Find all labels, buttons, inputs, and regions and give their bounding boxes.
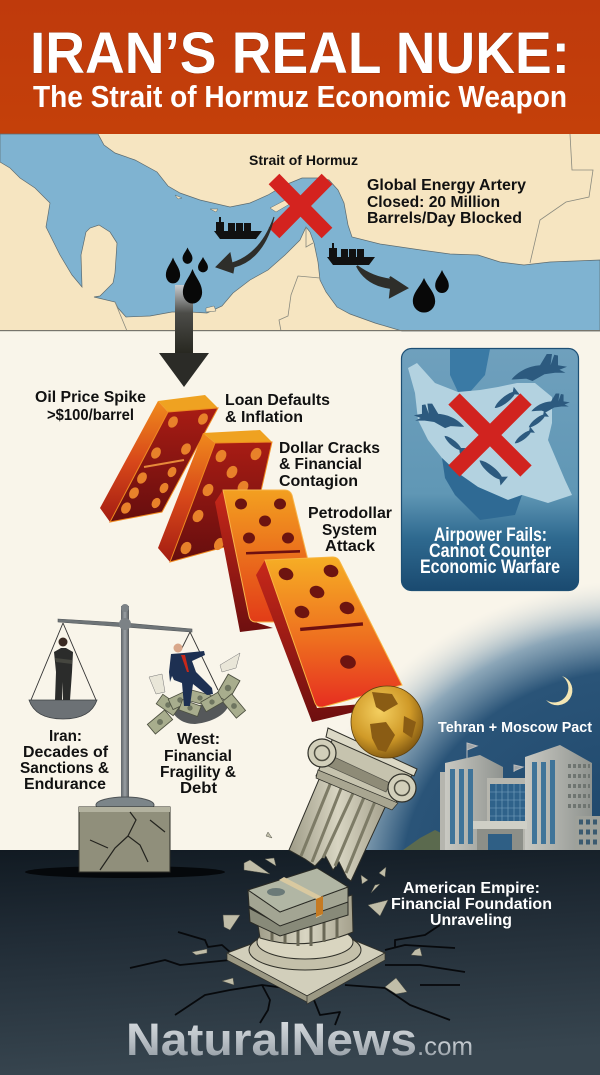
- loan defaults label: [225, 392, 330, 426]
- money stack: [248, 868, 348, 936]
- column capital: [308, 728, 417, 810]
- flying papers: [149, 653, 240, 694]
- jets and bombs: [414, 354, 570, 485]
- panel: Strait of Hormuz map: [0, 134, 600, 331]
- American Empire label: [391, 880, 552, 929]
- energy artery label: [367, 177, 526, 227]
- column shaft: [289, 777, 387, 881]
- arrow: tanker right: [357, 266, 407, 297]
- block shadow: [25, 866, 225, 878]
- Iran label: Endurance: [24, 776, 106, 793]
- American Empire label: Financial Foundation: [391, 896, 552, 913]
- persian gulf: [442, 458, 522, 520]
- ground: [0, 850, 600, 1075]
- domino 4: [256, 557, 405, 722]
- domino 3: [215, 490, 308, 632]
- Tehran Moscow label: Tehran + Moscow Pact: [438, 719, 592, 736]
- portico: [473, 821, 527, 850]
- money pile: [147, 674, 246, 734]
- night sky: [300, 560, 600, 855]
- loan defaults label: & Inflation: [225, 409, 303, 426]
- energy artery label: Closed: 20 Million: [367, 194, 500, 211]
- Iran label: [20, 728, 109, 793]
- energy artery label: Global Energy Artery: [367, 177, 526, 194]
- caspian sea: [450, 349, 490, 392]
- dollar cracks label: Contagion: [279, 473, 358, 490]
- icon: red X over strait: [274, 179, 327, 233]
- globe: [351, 686, 423, 758]
- panel: airpower fails: [402, 348, 578, 590]
- islands: [175, 195, 300, 312]
- strait label: Strait of Hormuz: [249, 153, 358, 168]
- arrow: down from oil to dominoes: [159, 269, 209, 387]
- icon: red X: [454, 399, 526, 471]
- rubble: [192, 832, 422, 994]
- heading: IRAN’S REAL NUKE:: [30, 21, 570, 86]
- low annex: [575, 816, 600, 850]
- arrow: tanker left: [216, 217, 274, 273]
- American Empire label: American Empire:: [403, 880, 540, 897]
- Iran scale pan: [29, 623, 97, 719]
- beam: [58, 619, 192, 632]
- right tower: [514, 745, 592, 850]
- caption: Airpower Fails:: [434, 525, 547, 546]
- petrodollar label: [308, 505, 392, 555]
- dollar cracks label: [279, 440, 380, 490]
- water: [0, 134, 600, 331]
- left tower: [440, 743, 503, 850]
- petrodollar label: Attack: [325, 538, 375, 555]
- hill: [403, 830, 445, 850]
- West label: West:: [177, 731, 220, 748]
- domino labels: [35, 389, 392, 555]
- caption: Cannot Counter: [429, 541, 552, 562]
- column base torus: [249, 930, 361, 970]
- map of Iran: [408, 363, 572, 503]
- dollar cracks label: & Financial: [279, 456, 362, 473]
- base dome: [96, 797, 154, 813]
- domino 2: [158, 430, 272, 562]
- title banner: [0, 0, 600, 134]
- icon: oil drops: [166, 248, 449, 313]
- oil price label: >$100/barrel: [47, 407, 134, 424]
- loan defaults label: Loan Defaults: [225, 392, 330, 409]
- broken column with globe: [227, 686, 423, 1004]
- American Empire label: Unraveling: [430, 912, 512, 929]
- caption: Economic Warfare: [420, 557, 560, 578]
- balance scale: [20, 604, 246, 878]
- West label: Fragility &: [160, 764, 236, 781]
- land borders: [115, 134, 593, 331]
- Iran label: Decades of: [23, 744, 109, 761]
- NaturalNews logo: NaturalNews: [126, 1014, 417, 1065]
- ground cracks: [130, 925, 465, 1025]
- column stub: [258, 895, 353, 946]
- Tehran Moscow buildings: [403, 743, 600, 850]
- domino 1: [100, 395, 218, 522]
- icon: tanker left: [214, 217, 262, 239]
- stone block: [79, 807, 170, 872]
- icon: tanker right: [327, 243, 375, 265]
- icon: crescent moon: [546, 676, 572, 705]
- petrodollar label: Petrodollar: [308, 505, 392, 522]
- West label: Debt: [180, 780, 218, 797]
- oil price label: Oil Price Spike: [35, 389, 146, 406]
- NaturalNews logo: .com: [417, 1031, 473, 1061]
- icon: Iranian figure: [54, 638, 73, 700]
- petrodollar label: System: [322, 522, 377, 539]
- West scale pan: [147, 632, 246, 734]
- post: [121, 606, 129, 806]
- Iran label: Sanctions &: [20, 760, 109, 777]
- dollar cracks label: Dollar Cracks: [279, 440, 380, 457]
- dominoes chain: [100, 395, 405, 722]
- icon: falling western figure: [169, 644, 213, 706]
- energy artery label: Barrels/Day Blocked: [367, 210, 522, 227]
- central glass hall: [487, 778, 529, 850]
- West label: [160, 731, 236, 797]
- Iran label: Iran:: [49, 728, 82, 745]
- broken pan: [170, 700, 230, 724]
- West label: Financial: [164, 748, 232, 765]
- plinth: [227, 922, 385, 1004]
- oil price label: [35, 389, 146, 424]
- caption: [420, 525, 560, 578]
